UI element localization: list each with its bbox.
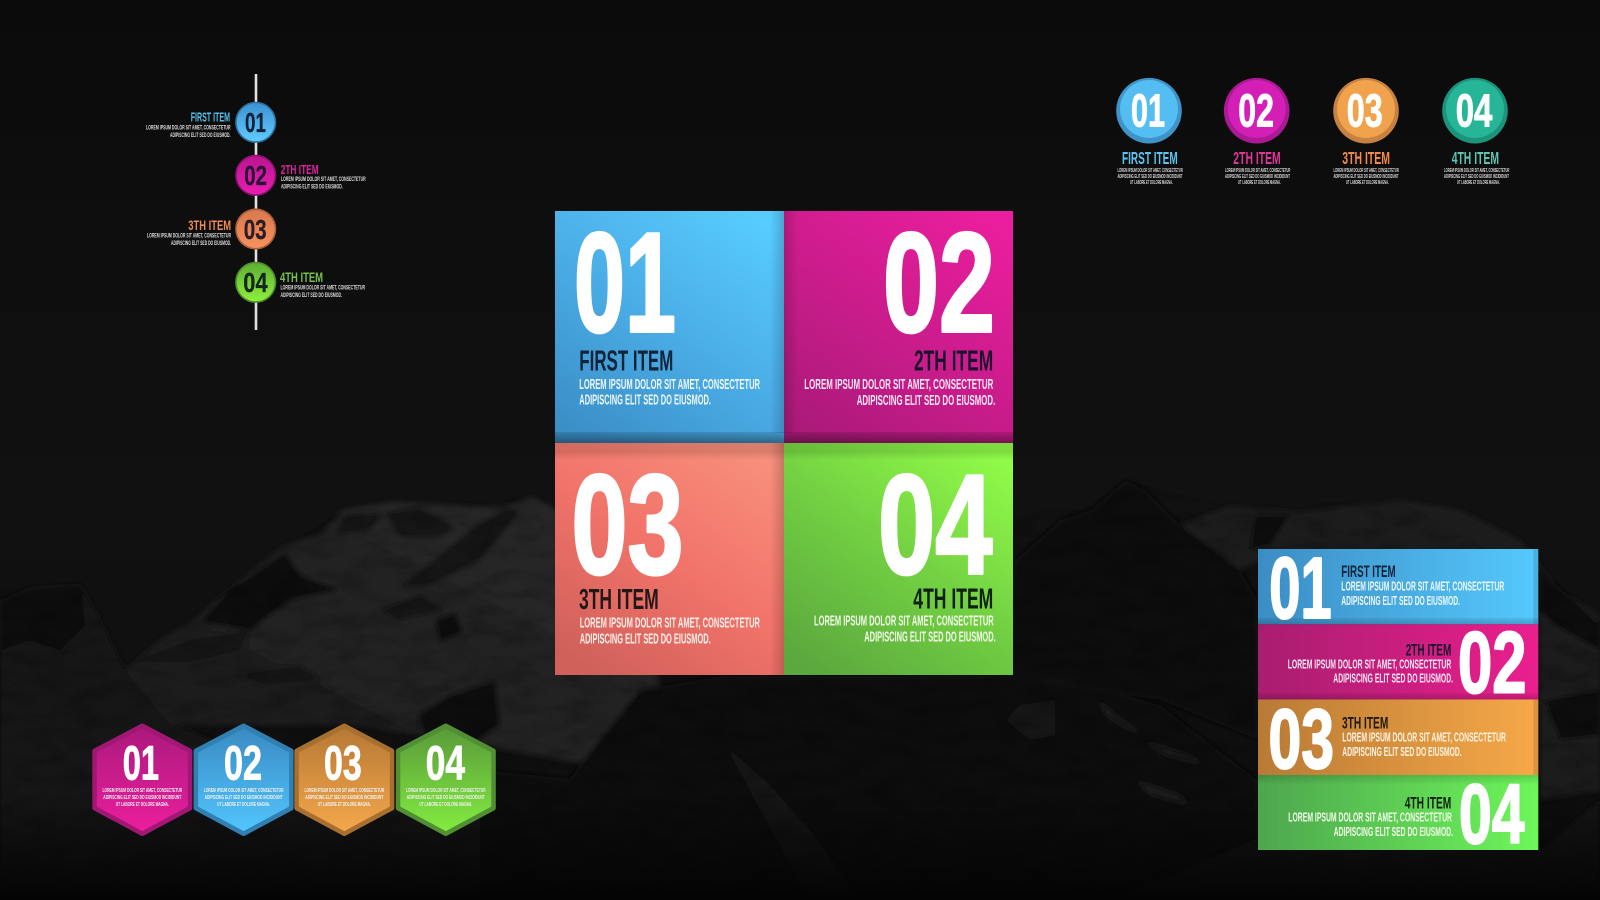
timeline item 02	[235, 155, 366, 196]
timeline item 03	[147, 208, 276, 250]
hexagon 03: LOREM IPSUM DOLOR SIT AMET, CONSECTETUR	[304, 788, 384, 794]
hexagon 04: LOREM IPSUM DOLOR SIT AMET, CONSECTETUR	[406, 788, 486, 794]
circle item 01: FIRST ITEM	[1122, 148, 1178, 168]
circle item 01: LOREM IPSUM DOLOR SIT AMET, CONSECTETUR	[1118, 168, 1183, 174]
circle item 02: UT LABORE ET DOLORE MAGNA.	[1238, 180, 1281, 186]
quadrant 02 magenta: ADIPISCING ELIT SED DO EIUSMOD.	[857, 393, 995, 409]
bar 01 blue	[1258, 540, 1538, 637]
quadrant 01 blue: FIRST ITEM	[579, 346, 673, 378]
circle item 03: ADIPISCING ELIT SED DO EIUSMOD INCIDIDUNT	[1334, 174, 1398, 180]
timeline item 01: ADIPISCING ELIT SED DO EIUSMOD.	[170, 133, 231, 139]
hexagon 01: 01	[123, 738, 159, 790]
circle item 04: LOREM IPSUM DOLOR SIT AMET, CONSECTETUR	[1444, 168, 1510, 174]
timeline item 03: ADIPISCING ELIT SED DO EIUSMOD.	[171, 241, 231, 247]
bar 03 orange	[1258, 692, 1538, 786]
timeline item 03: 3TH ITEM	[188, 217, 231, 233]
bar 01 blue: FIRST ITEM	[1341, 563, 1396, 581]
bar 04 green: 04	[1459, 767, 1525, 861]
timeline item 02: 02	[244, 160, 267, 191]
bar 03 orange: 3TH ITEM	[1342, 714, 1388, 732]
quadrant 02 magenta: 02	[883, 204, 995, 362]
bar 01 blue: 01	[1269, 540, 1332, 637]
bar 02 magenta	[1258, 614, 1538, 712]
circle item 04: 4TH ITEM	[1452, 148, 1499, 168]
bar 04 green: 4TH ITEM	[1405, 794, 1451, 812]
quadrant 02 magenta: LOREM IPSUM DOLOR SIT AMET, CONSECTETUR	[804, 377, 994, 393]
circle item 02	[1224, 78, 1291, 186]
hexagon 01	[95, 726, 190, 834]
circle item 04: ADIPISCING ELIT SED DO EIUSMOD INCIDIDUNT	[1444, 174, 1509, 180]
timeline item 01: LOREM IPSUM DOLOR SIT AMET, CONSECTETUR	[146, 126, 231, 132]
hexagon 04: 04	[426, 738, 465, 790]
hexagon 01: ADIPISCING ELIT SED DO EIUSMOD INCIDIDUNT	[103, 795, 182, 801]
hexagon 01: UT LABORE ET DOLORE MAGNA.	[116, 802, 169, 808]
timeline: vertical list top left	[146, 74, 366, 330]
quadrant 04 green: LOREM IPSUM DOLOR SIT AMET, CONSECTETUR	[814, 614, 994, 630]
quadrant 01 blue: LOREM IPSUM DOLOR SIT AMET, CONSECTETUR	[579, 377, 760, 393]
timeline item 01: 01	[245, 107, 266, 138]
circle item 03: 03	[1347, 84, 1383, 136]
bar 02 magenta: 02	[1458, 614, 1526, 712]
hexagon 04: ADIPISCING ELIT SED DO EIUSMOD INCIDIDUNT	[407, 795, 485, 801]
timeline item 02: 2TH ITEM	[281, 162, 319, 177]
circle item 03	[1333, 78, 1399, 186]
quadrant 01 blue: ADIPISCING ELIT SED DO EIUSMOD.	[579, 393, 711, 409]
circle item 02: LOREM IPSUM DOLOR SIT AMET, CONSECTETUR	[1225, 168, 1291, 174]
timeline item 01	[146, 102, 276, 143]
timeline item 03: 03	[244, 214, 267, 245]
bar 02 magenta: 2TH ITEM	[1406, 641, 1451, 659]
quadrant 04 green	[784, 443, 1013, 675]
quadrant 01 blue: 01	[574, 204, 676, 362]
quadrant 04 green: 4TH ITEM	[913, 583, 993, 615]
hexagon 03: UT LABORE ET DOLORE MAGNA.	[318, 802, 371, 808]
bar 02 magenta: ADIPISCING ELIT SED DO EIUSMOD.	[1333, 671, 1453, 686]
bar 02 magenta: LOREM IPSUM DOLOR SIT AMET, CONSECTETUR	[1288, 656, 1452, 671]
hexagon 04: UT LABORE ET DOLORE MAGNA.	[419, 802, 473, 808]
circle item 02: ADIPISCING ELIT SED DO EIUSMOD INCIDIDUNT	[1225, 174, 1290, 180]
bar 01 blue: ADIPISCING ELIT SED DO EIUSMOD.	[1341, 593, 1460, 608]
hexagon 02: ADIPISCING ELIT SED DO EIUSMOD INCIDIDUNT	[205, 795, 283, 801]
stacked bars panel bottom right	[1258, 540, 1538, 861]
quadrant 02 magenta: 2TH ITEM	[914, 346, 993, 378]
circle item 02: 2TH ITEM	[1233, 148, 1281, 168]
hexagon 03	[297, 726, 392, 834]
hexagon 03: 03	[324, 738, 362, 790]
quadrant 03 coral	[555, 443, 784, 675]
bar 03 orange: ADIPISCING ELIT SED DO EIUSMOD.	[1342, 744, 1462, 759]
circle item 01: 01	[1131, 84, 1165, 136]
quadrant 03 coral: LOREM IPSUM DOLOR SIT AMET, CONSECTETUR	[580, 615, 760, 631]
hexagon 02: UT LABORE ET DOLORE MAGNA.	[217, 802, 270, 808]
circle item 04	[1442, 78, 1510, 186]
quadrant 02 magenta	[784, 204, 1013, 443]
hexagon 03: ADIPISCING ELIT SED DO EIUSMOD INCIDIDUNT	[305, 795, 384, 801]
timeline item 04: 04	[243, 267, 268, 298]
hexagon 02: LOREM IPSUM DOLOR SIT AMET, CONSECTETUR	[204, 788, 284, 794]
circle item 01	[1116, 78, 1183, 186]
bar 04 green	[1258, 767, 1538, 861]
circle item 01: ADIPISCING ELIT SED DO EIUSMOD INCIDIDUNT	[1118, 174, 1182, 180]
hexagon 01: LOREM IPSUM DOLOR SIT AMET, CONSECTETUR	[103, 788, 182, 794]
quadrant 03 coral: 03	[572, 446, 684, 604]
circle item 03: LOREM IPSUM DOLOR SIT AMET, CONSECTETUR	[1334, 168, 1399, 174]
timeline item 04: ADIPISCING ELIT SED DO EIUSMOD.	[280, 293, 342, 299]
hexagon 02: 02	[224, 738, 262, 790]
timeline item 02: ADIPISCING ELIT SED DO EIUSMOD.	[281, 184, 343, 190]
quadrant 03 coral: ADIPISCING ELIT SED DO EIUSMOD.	[580, 631, 711, 647]
timeline item 02: LOREM IPSUM DOLOR SIT AMET, CONSECTETUR	[281, 177, 366, 183]
quadrant 01 blue	[555, 204, 784, 443]
bar 04 green: ADIPISCING ELIT SED DO EIUSMOD.	[1334, 824, 1453, 839]
bar 03 orange: 03	[1268, 692, 1334, 786]
circle item 02: 02	[1238, 84, 1274, 136]
timeline item 04	[235, 262, 365, 303]
hexagon 02	[196, 726, 291, 834]
timeline item 03: LOREM IPSUM DOLOR SIT AMET, CONSECTETUR	[147, 233, 231, 239]
timeline item 04: LOREM IPSUM DOLOR SIT AMET, CONSECTETUR	[280, 286, 365, 292]
background: dark mountain photo	[0, 486, 1600, 900]
quadrant 03 coral: 3TH ITEM	[579, 584, 659, 616]
timeline item 04: 4TH ITEM	[280, 269, 323, 285]
hexagon row bottom left	[95, 726, 493, 834]
circle item 04: UT LABORE ET DOLORE MAGNA.	[1457, 180, 1500, 186]
quadrant 04 green: 04	[878, 446, 993, 604]
circle item 03: 3TH ITEM	[1342, 148, 1390, 168]
main quadrant panel centre	[555, 204, 1013, 675]
circle item 03: UT LABORE ET DOLORE MAGNA.	[1346, 180, 1389, 186]
hexagon 04	[398, 726, 493, 834]
circle item 04: 04	[1456, 84, 1493, 136]
timeline item 01: FIRST ITEM	[191, 110, 230, 125]
circle item 01: UT LABORE ET DOLORE MAGNA.	[1130, 180, 1173, 186]
bar 04 green: LOREM IPSUM DOLOR SIT AMET, CONSECTETUR	[1288, 810, 1452, 825]
quadrant 04 green: ADIPISCING ELIT SED DO EIUSMOD.	[864, 630, 996, 646]
circle row top right	[1116, 78, 1510, 186]
